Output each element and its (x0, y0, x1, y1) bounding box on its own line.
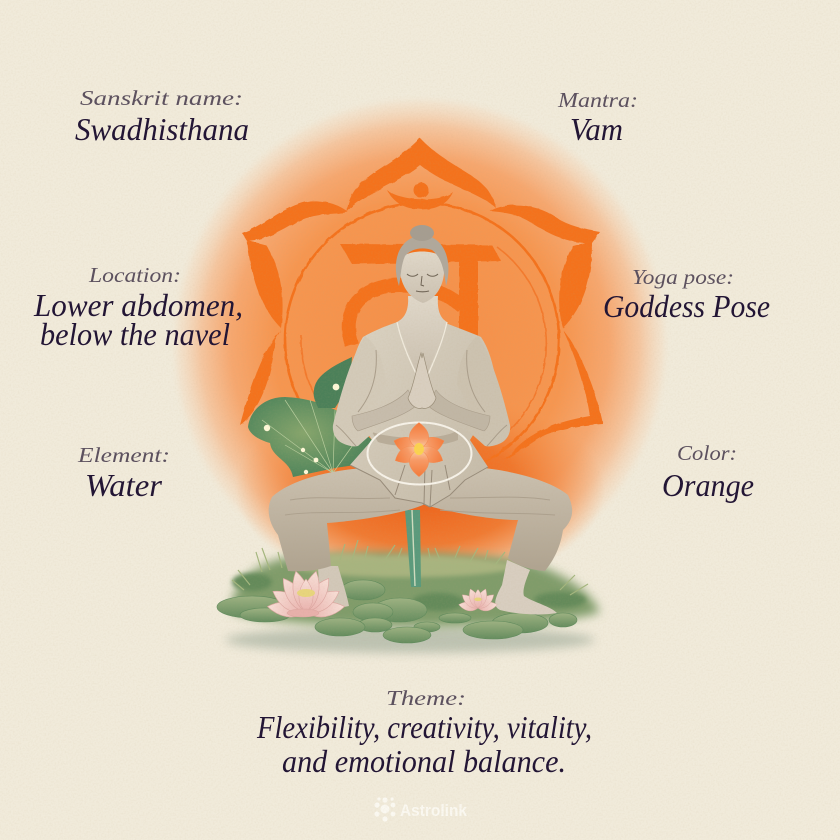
va glyph (340, 244, 501, 345)
praying hands (408, 353, 436, 408)
label: Mantra: (557, 88, 638, 112)
right pink lotus (458, 587, 498, 612)
big lotus leaf (248, 357, 372, 477)
lotus stem (405, 510, 421, 587)
wordmark: Astrolink (400, 801, 467, 820)
hair bun (410, 225, 434, 241)
info: Sanskrit name (75, 86, 249, 147)
left sleeve (333, 336, 386, 446)
inner ring arcs (301, 247, 546, 432)
value: Goddess Pose (603, 288, 770, 324)
label: Element: (77, 443, 170, 467)
right foot (495, 560, 557, 614)
bindu dot (414, 182, 428, 198)
seated woman in goddess pose (269, 225, 572, 614)
left foot (318, 566, 349, 612)
left leg (269, 468, 440, 571)
leaf veins (262, 400, 360, 473)
lily pads (217, 580, 577, 643)
value: Swadhisthana (75, 111, 249, 147)
info: Color (662, 441, 754, 503)
grass mass (232, 553, 600, 627)
value line two: and emotional balance. (282, 743, 566, 779)
label: Theme: (386, 686, 466, 710)
label: Sanskrit name: (80, 86, 243, 110)
info: Yoga pose (603, 265, 770, 324)
right sleeve (457, 336, 510, 446)
info: Mantra (557, 88, 638, 147)
right leg (400, 467, 572, 571)
orange radial glow (168, 93, 672, 597)
value: Orange (662, 467, 754, 503)
face (400, 252, 444, 303)
upper leaf (314, 357, 352, 408)
upper right petal (490, 205, 600, 243)
left pink lotus (266, 569, 346, 619)
right forearm (427, 390, 490, 431)
left side petal band (247, 240, 283, 328)
info: Element (77, 443, 170, 503)
closed eyes, nose, mouth (407, 274, 438, 292)
lower left petal (240, 330, 281, 425)
sacral lotus emblem (368, 422, 472, 484)
outer ring (285, 203, 559, 477)
white ellipse ring (368, 422, 472, 484)
robe torso (345, 320, 498, 507)
darker grass patches (232, 573, 586, 611)
chakra mandala (240, 138, 603, 477)
collar trim (397, 322, 447, 382)
robe hem and folds (350, 465, 488, 507)
label: Yoga pose: (632, 265, 734, 289)
info: Theme (256, 686, 592, 779)
label: Location: (88, 263, 181, 287)
stem highlight (412, 510, 415, 586)
left forearm (352, 390, 417, 431)
water shadow (225, 627, 595, 653)
lily pond base (217, 510, 600, 653)
value: Water (85, 467, 163, 503)
hair (396, 235, 448, 286)
value line two: below the navel (40, 316, 230, 352)
sleeve fold lines (336, 350, 507, 446)
label: Color: (677, 441, 737, 465)
leaf sparkles (264, 384, 339, 474)
lower right petal (505, 330, 603, 460)
value: Vam (570, 111, 623, 147)
info: Location (33, 263, 243, 352)
Astrolink logo (374, 797, 467, 822)
robe belt (372, 430, 458, 446)
head (396, 225, 448, 303)
right side petal band (559, 241, 592, 328)
trouser folds (285, 497, 555, 515)
value line one: Lower abdomen, (33, 287, 243, 323)
top petal (347, 138, 496, 212)
upper left petal (242, 201, 348, 241)
value line one: Flexibility, creativity, vitality, (256, 709, 592, 745)
pale grass tufts (290, 554, 520, 577)
crescent (387, 190, 453, 209)
neck and chest (397, 296, 447, 372)
icon: sunburst (374, 797, 395, 822)
grass blades (232, 540, 588, 595)
